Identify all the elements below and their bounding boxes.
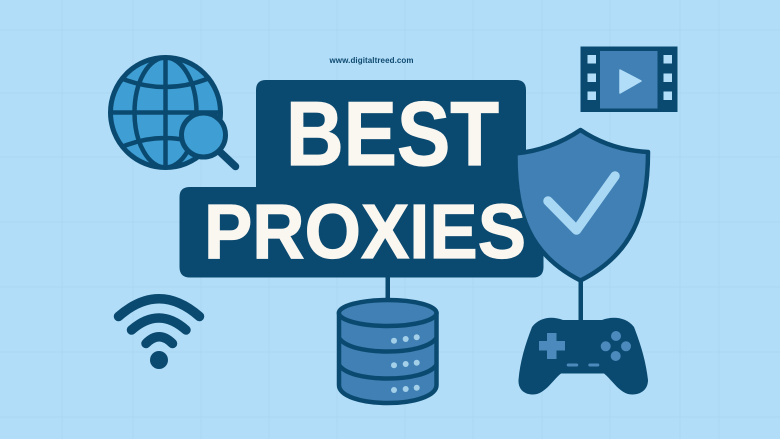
title line: BEST: BEST (286, 84, 499, 185)
title panel (180, 80, 544, 278)
icon: shield with check (515, 130, 648, 280)
icon: database (339, 300, 437, 403)
stem: shield to gamepad connector (578, 278, 583, 322)
icon: wifi (118, 299, 200, 369)
icon: video film strip (580, 46, 678, 112)
title text (204, 84, 526, 275)
icon: globe with magnifier (110, 57, 236, 168)
icon: game controller (518, 318, 648, 394)
stem: database connector (386, 277, 390, 301)
website url: www.digitaltreed.com (328, 56, 414, 65)
title line: PROXIES: PROXIES (204, 189, 526, 275)
